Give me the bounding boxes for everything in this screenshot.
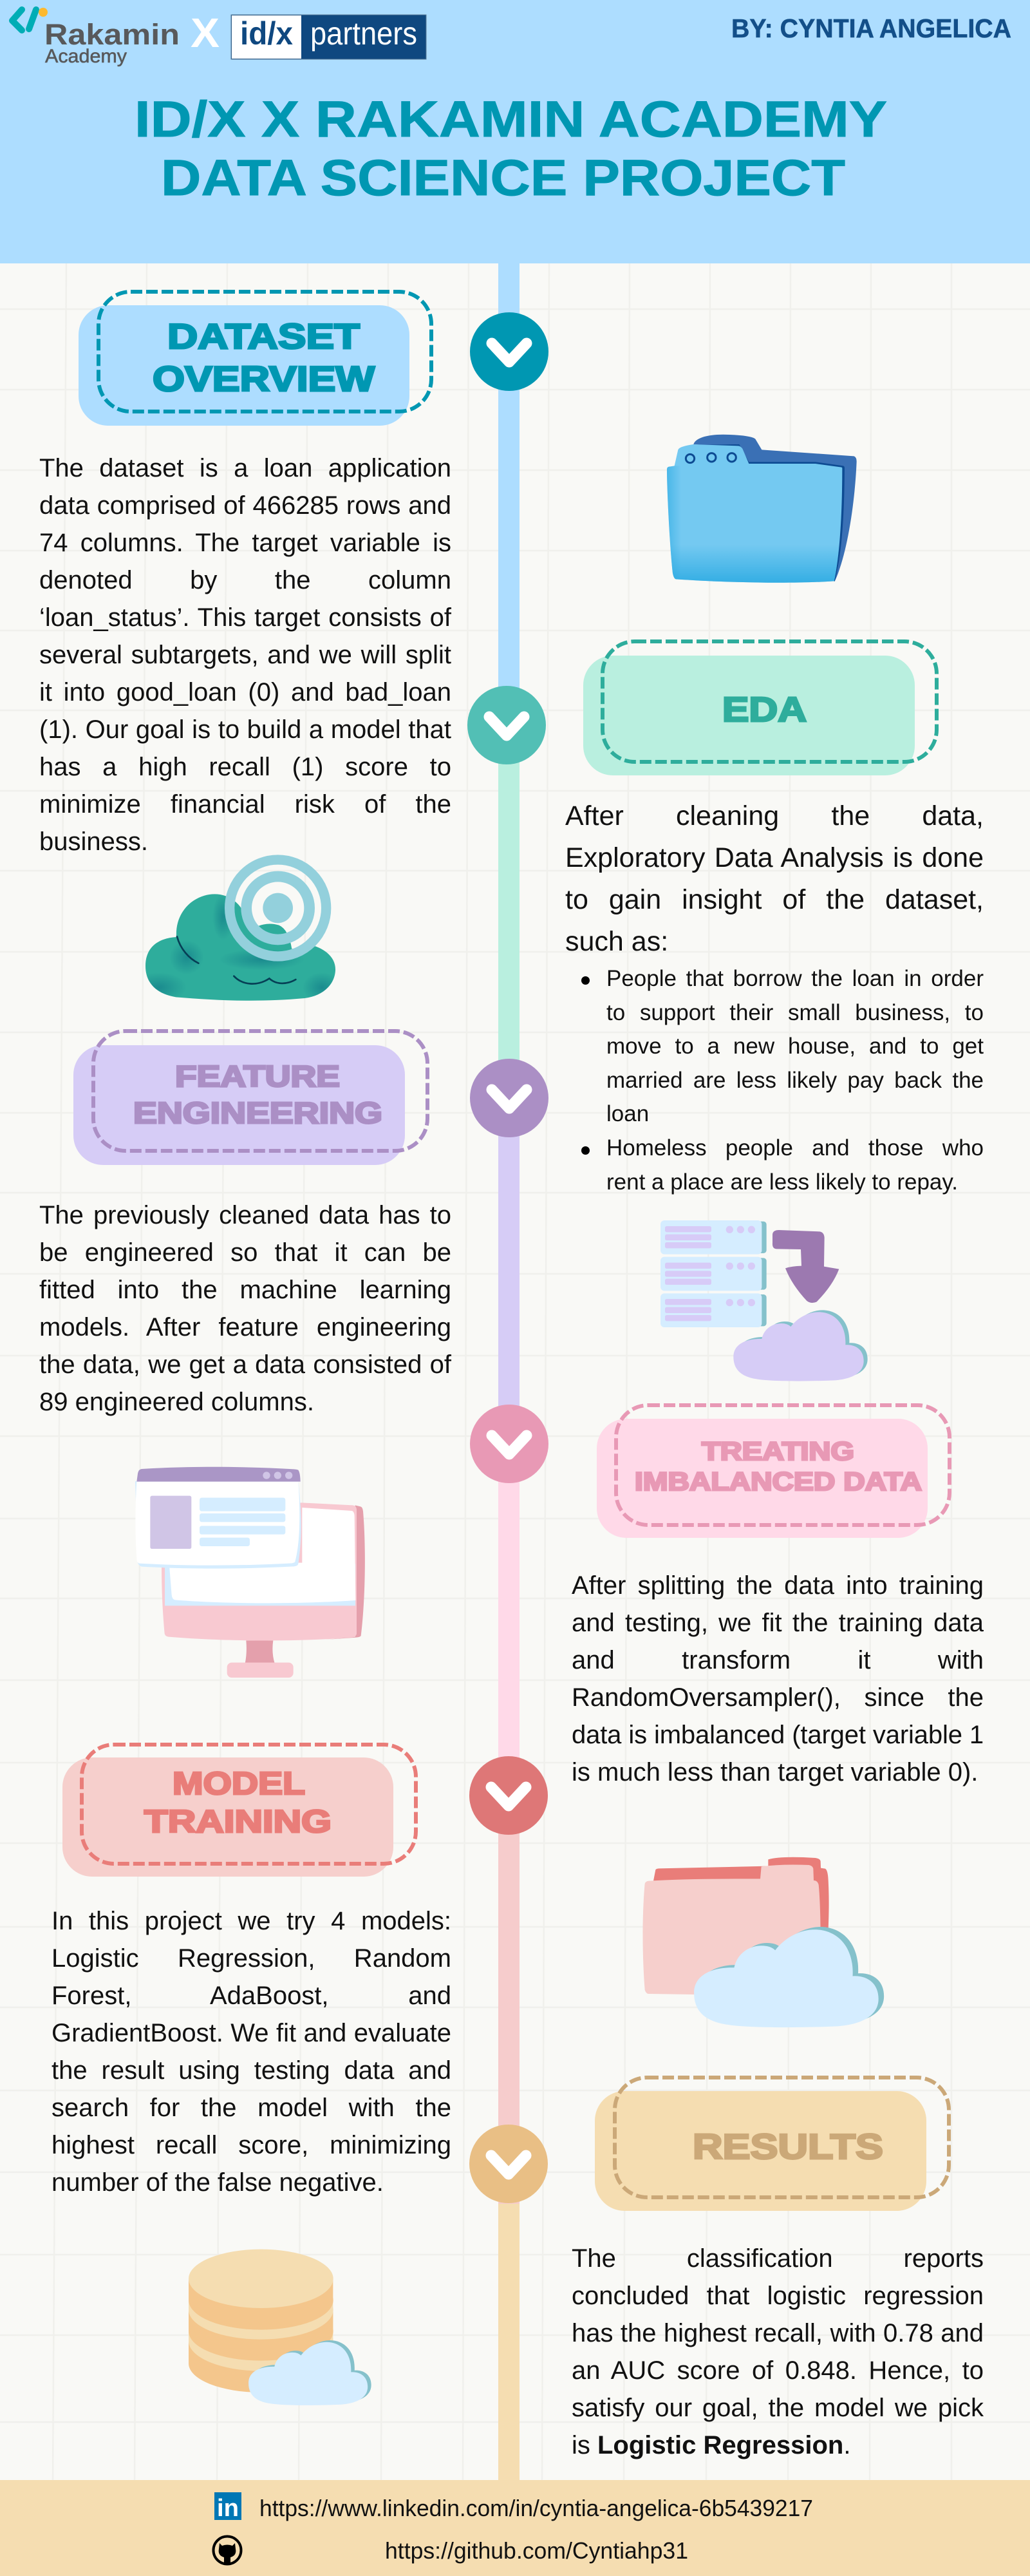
timeline spine [498, 263, 520, 2481]
text block: EDA bullet list: to support their small business, to [606, 1000, 984, 1025]
heading: EDA [583, 641, 937, 775]
header band [0, 0, 1030, 263]
logo: id/x partners [231, 15, 426, 59]
text block: feature engineering: fitted into the machine learning [39, 1276, 451, 1304]
illustration: blue folder [665, 435, 857, 584]
heading: model training: MODEL [173, 1766, 305, 1801]
timeline marker 3 [470, 1059, 548, 1137]
text block: dataset overview: business. [39, 828, 148, 856]
text block: dataset overview: has a high recall (1) score to [39, 753, 451, 781]
text block: model training: highest recall score, minimizing [52, 2131, 451, 2159]
text block: EDA bullet list: loan [606, 1101, 649, 1126]
heading: model training: TRAINING [144, 1804, 332, 1839]
title [135, 90, 887, 206]
heading: treating imbalanced data [597, 1405, 950, 1538]
heading: feature engineering [73, 1031, 427, 1165]
text block: EDA bullet list: move to a new house, and to get [606, 1034, 984, 1059]
text block: feature engineering: The previously cleaned data has to [39, 1201, 451, 1229]
text block: dataset overview: it into good_loan (0) and bad_loan [39, 678, 451, 706]
text block: model training [52, 1907, 451, 2197]
text block: EDA bullet list: rent a place are less likely to repay. [606, 1170, 958, 1195]
text block: dataset overview: data comprised of 466285 rows and [39, 491, 451, 520]
heading: EDA: EDA [722, 690, 807, 729]
text block: results: is Logistic Regression. [572, 2431, 850, 2459]
heading: feature engineering: ENGINEERING [133, 1096, 382, 1130]
text block: dataset overview: (1). Our goal is to build a model that [39, 715, 451, 744]
text block: feature engineering [39, 1201, 452, 1416]
text block: dataset overview: several subtargets, and we will split [39, 641, 451, 669]
heading: treating imbalanced data: IMBALANCED DATA [635, 1468, 922, 1496]
text block: EDA intro [565, 800, 984, 957]
text block: model training: In this project we try 4 models: [52, 1907, 451, 1935]
timeline marker 5 [469, 1756, 548, 1835]
text block: results: has the highest recall, with 0.78 and [572, 2319, 984, 2347]
text block: feature engineering: 89 engineered columns. [39, 1388, 314, 1416]
text block: treating imbalanced data: RandomOversampler(), since the [572, 1683, 984, 1712]
heading: model training [62, 1745, 416, 1877]
text block: model training: Logistic Regression, Random [52, 1944, 451, 1973]
author byline: BY: CYNTIA ANGELICA [731, 14, 1011, 43]
illustration: servers to cloud [660, 1220, 868, 1381]
logo separator X: X [191, 10, 220, 56]
heading: feature engineering: FEATURE [175, 1059, 340, 1093]
text block: dataset overview: ‘loan_status’. This target consists of [39, 603, 451, 632]
text block: model training: Forest, AdaBoost, and [52, 1982, 451, 2010]
text block: dataset overview: 74 columns. The target variable is [39, 529, 451, 557]
text block: results: satisfy our goal, the model we pick [572, 2394, 984, 2422]
heading: dataset overview: OVERVIEW [153, 359, 375, 399]
icon: LinkedIn: in [217, 2495, 239, 2522]
text block: results [572, 2244, 984, 2459]
illustration: database with cloud [189, 2249, 371, 2405]
illustration: pink folder with cloud [643, 1857, 884, 2027]
timeline marker 4 [470, 1405, 548, 1483]
text block: treating imbalanced data [572, 1571, 984, 1786]
illustration: monitor with window [135, 1467, 365, 1678]
text block: model training: search for the model with the [52, 2094, 451, 2122]
illustration: cloud with target [131, 860, 341, 1003]
text block: EDA intro: to gain insight of the dataset, [565, 884, 984, 915]
heading: treating imbalanced data: TREATING [702, 1437, 854, 1466]
text block: results: concluded that logistic regression [572, 2282, 984, 2310]
text block: results: an AUC score of 0.848. Hence, to [572, 2356, 984, 2385]
logo: id/x partners: partners [310, 15, 417, 52]
text block: treating imbalanced data: and testing, we fit the training data [572, 1609, 984, 1637]
text block: EDA intro: Exploratory Data Analysis is done [565, 842, 984, 873]
text block: dataset overview: The dataset is a loan application [39, 454, 451, 482]
heading: results: RESULTS [693, 2126, 883, 2166]
footer band [0, 2480, 1030, 2576]
timeline marker 2 [467, 686, 546, 764]
link: LinkedIn URL: https://www.linkedin.com/in/cyntia-angelica-6b5439217 [259, 2495, 813, 2521]
text block: feature engineering: models. After feature engineering [39, 1313, 451, 1341]
text block: model training: number of the false negative. [52, 2168, 384, 2197]
text block: dataset overview: minimize financial risk of the [39, 790, 451, 819]
text block: EDA intro: After cleaning the data, [565, 800, 984, 831]
title: ID/X X RAKAMIN ACADEMY [135, 90, 887, 147]
text block: feature engineering: be engineered so that it can be [39, 1238, 451, 1267]
logo: Rakamin Academy: Academy [45, 46, 127, 67]
text block: treating imbalanced data: is much less than target variable 0). [572, 1758, 978, 1786]
text block: EDA bullet list: People that borrow the loan in order [606, 966, 984, 991]
text block: results: The classification reports [572, 2244, 984, 2273]
link: GitHub URL: https://github.com/Cyntiahp31 [385, 2537, 688, 2564]
text block: model training: GradientBoost. We fit and evaluate [52, 2019, 451, 2047]
text block: EDA bullet list [581, 966, 984, 1195]
timeline marker 1 [470, 312, 548, 391]
heading: dataset overview [79, 292, 431, 426]
timeline marker 6 [469, 2125, 548, 2203]
text block: treating imbalanced data: and transform it with [572, 1646, 984, 1674]
text block: treating imbalanced data: data is imbalanced (target variable 1 [572, 1721, 984, 1749]
heading: results [595, 2078, 949, 2211]
title: DATA SCIENCE PROJECT [161, 149, 845, 206]
text block: treating imbalanced data: After splitting the data into training [572, 1571, 984, 1600]
text block: model training: the result using testing data and [52, 2056, 451, 2085]
text block: EDA intro: such as: [565, 926, 668, 957]
text block: EDA bullet list: Homeless people and those who [606, 1135, 984, 1160]
logo: Rakamin Academy [12, 8, 180, 67]
heading: dataset overview: DATASET [167, 316, 360, 356]
text block: dataset overview: denoted by the column [39, 566, 451, 594]
logo: Rakamin Academy: Rakamin [44, 18, 180, 51]
icon: GitHub [214, 2536, 241, 2564]
text block: feature engineering: the data, we get a data consisted of [39, 1350, 451, 1379]
logo: id/x partners: id/x [240, 15, 293, 52]
text block: dataset overview [39, 454, 452, 856]
text block: EDA bullet list: married are less likely pay back the [606, 1068, 984, 1093]
